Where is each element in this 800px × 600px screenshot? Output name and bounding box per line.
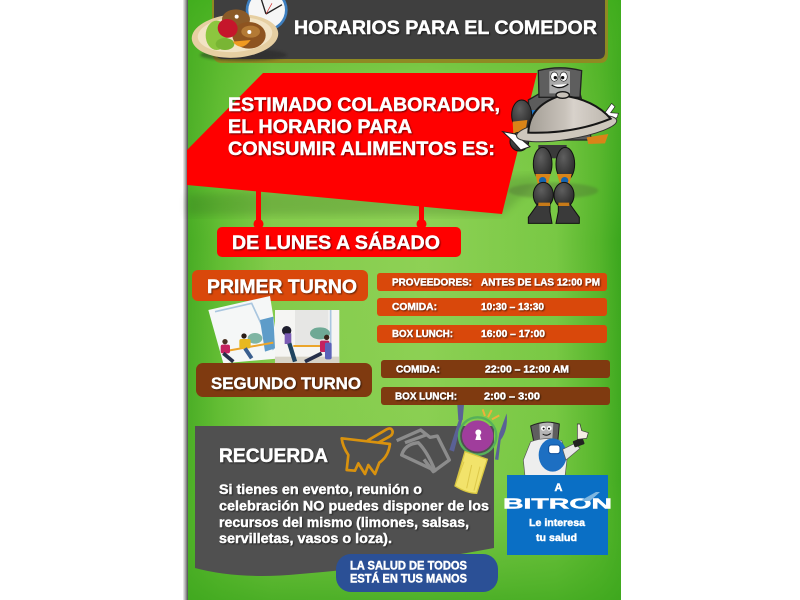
panel: a bitron le interesa tu salud: tu salud <box>536 532 577 544</box>
icon: napkins <box>397 430 449 472</box>
title band <box>212 0 608 63</box>
row: comida nocturna: 22:00 – 12:00 AM <box>485 364 569 376</box>
row: comida nocturna <box>381 360 610 378</box>
banner message text <box>228 95 500 160</box>
icon: mortar <box>342 428 393 474</box>
date bar: de lunes a sábado: DE LUNES A SÁBADO <box>232 232 440 254</box>
banner message text: EL HORARIO PARA <box>228 117 412 138</box>
schedule: segundo turno <box>381 360 610 405</box>
icon: yellow glass <box>455 452 487 493</box>
bitron logo: BITRON <box>503 496 612 512</box>
heading: primer turno: PRIMER TURNO <box>207 277 357 298</box>
row: box lunch nocturno <box>381 387 610 405</box>
reminder paragraph <box>219 481 489 546</box>
panel: a bitron le interesa tu salud: Le interesa <box>529 517 585 529</box>
row: box lunch: 16:00 – 17:00 <box>481 328 545 340</box>
row: proveedores: PROVEEDORES: <box>392 276 472 288</box>
panel: red message banner <box>187 73 545 229</box>
row: box lunch: BOX LUNCH: <box>392 328 453 340</box>
callout: la salud de todos <box>336 554 498 592</box>
panel: recuerda <box>195 426 494 576</box>
heading: recuerda: RECUERDA <box>219 446 328 467</box>
row: proveedores: ANTES DE LAS 12:00 PM <box>481 276 600 288</box>
heading: segundo turno: SEGUNDO TURNO <box>211 374 361 393</box>
row: box lunch nocturno: BOX LUNCH: <box>395 390 457 402</box>
panel: a bitron le interesa tu salud <box>503 475 612 555</box>
icon: purple plate <box>459 409 499 455</box>
row: proveedores <box>377 273 607 291</box>
reminder paragraph: celebración NO puedes disponer de los <box>219 498 489 514</box>
reminder paragraph: servilletas, vasos o loza). <box>219 530 392 546</box>
title heading: HORARIOS PARA EL COMEDOR <box>294 18 597 39</box>
row: comida: COMIDA: <box>392 301 437 313</box>
row: comida nocturna: COMIDA: <box>396 364 440 376</box>
heading: primer turno <box>192 270 368 301</box>
reminder paragraph: recursos del mismo (limones, salsas, <box>219 514 469 530</box>
banner message text: CONSUMIR ALIMENTOS ES: <box>228 139 495 160</box>
icon: clock and food plate <box>190 0 288 61</box>
row: comida: 10:30 – 13:30 <box>481 301 544 313</box>
green background <box>183 0 621 600</box>
row: box lunch nocturno: 2:00 – 3:00 <box>484 390 540 402</box>
icon: robot mascot with serving dome <box>503 68 618 223</box>
callout: la salud de todos: LA SALUD DE TODOS <box>350 560 467 572</box>
illustration: people in the dining room <box>208 296 339 363</box>
callout: la salud de todos: ESTÁ EN TUS MANOS <box>350 572 467 586</box>
date bar: de lunes a sábado <box>217 227 461 257</box>
reminder paragraph: Si tienes en evento, reunión o <box>219 481 422 497</box>
panel: a bitron le interesa tu salud: A <box>555 482 563 494</box>
banner message text: ESTIMADO COLABORADOR, <box>228 95 500 116</box>
row: comida <box>377 298 607 316</box>
schedule: primer turno <box>377 273 607 343</box>
row: box lunch <box>377 325 607 343</box>
icon: small robot mascot <box>523 422 588 477</box>
icons: mortar, napkins, plate and glass <box>342 405 507 493</box>
heading: segundo turno <box>196 363 372 397</box>
icon: fork and knife <box>449 405 507 460</box>
